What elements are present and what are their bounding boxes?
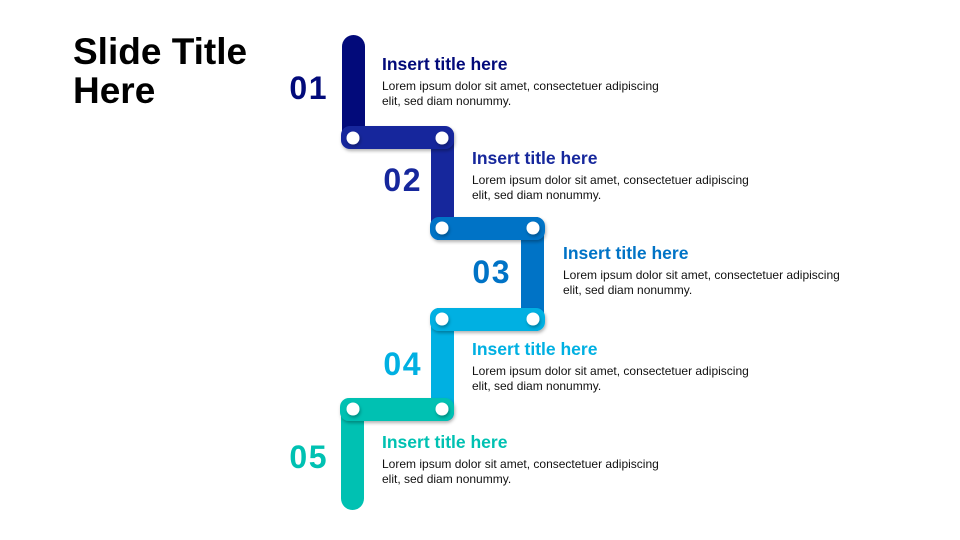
text: 03 <box>472 254 511 290</box>
text: 02 <box>383 162 422 198</box>
text: 05 <box>289 439 328 475</box>
text: 04 <box>383 346 422 382</box>
text: Lorem ipsum dolor sit amet, consectetuer adipiscing <box>472 364 749 378</box>
text: elit, sed diam nonummy. <box>472 378 601 392</box>
title <box>73 31 247 111</box>
text: Insert title here <box>563 243 688 263</box>
step 4 <box>383 339 749 392</box>
step 1 <box>289 54 659 108</box>
segment 1 <box>342 35 365 149</box>
text: 01 <box>289 70 328 106</box>
text: Lorem ipsum dolor sit amet, consectetuer adipiscing <box>382 457 659 471</box>
text: Insert title here <box>472 148 597 168</box>
dots <box>346 132 540 416</box>
text: Lorem ipsum dolor sit amet, consectetuer adipiscing <box>472 173 749 187</box>
text: elit, sed diam nonummy. <box>563 282 692 296</box>
text: Lorem ipsum dolor sit amet, consectetuer adipiscing <box>563 268 840 282</box>
text: Lorem ipsum dolor sit amet, consectetuer adipiscing <box>382 79 659 93</box>
step 2 <box>383 148 749 202</box>
text: elit, sed diam nonummy. <box>472 188 601 202</box>
title: Here <box>73 70 155 111</box>
step 5 <box>289 432 659 486</box>
segment 2 <box>341 126 454 240</box>
step 3 <box>472 243 840 296</box>
text: Insert title here <box>382 432 507 452</box>
segment 3 <box>430 217 545 331</box>
text: elit, sed diam nonummy. <box>382 472 511 486</box>
text: Insert title here <box>472 339 597 359</box>
segment 5 <box>340 398 454 510</box>
segment 4 <box>430 308 545 421</box>
text: Insert title here <box>382 54 507 74</box>
title: Slide Title <box>73 31 247 72</box>
text: elit, sed diam nonummy. <box>382 94 511 108</box>
